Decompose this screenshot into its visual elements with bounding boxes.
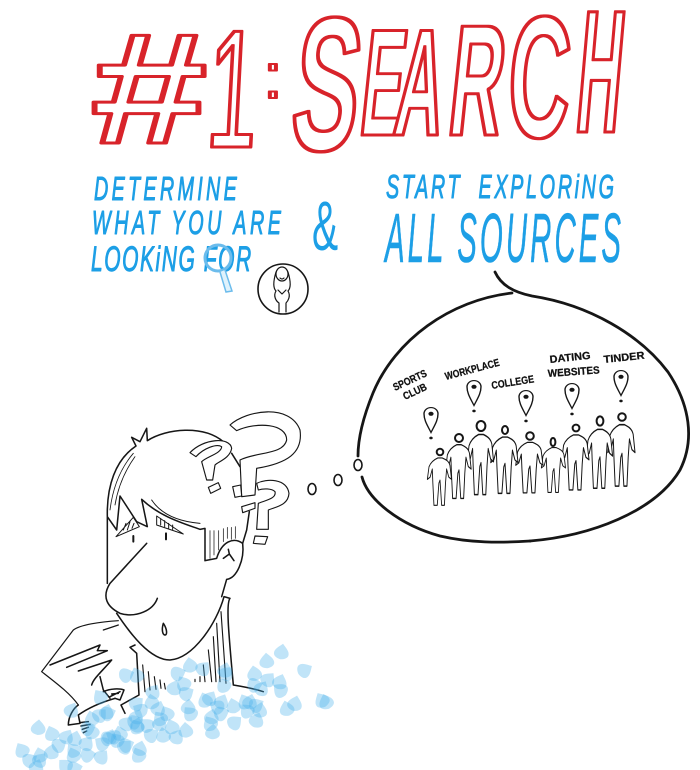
text: start exploring all sources: ALL SOURCES	[383, 199, 621, 278]
title: #1: SEARCH: :	[264, 40, 282, 112]
neck hatching	[143, 612, 226, 692]
nose and smile	[106, 543, 157, 615]
sideburn hatching	[210, 527, 235, 558]
group of people	[427, 413, 635, 505]
text: determine what you are looking for: WHAT YOU ARE	[92, 204, 282, 241]
labels: sources: WORKPLACE	[444, 357, 501, 383]
thought bubbles	[308, 460, 362, 494]
title: #1: SEARCH: 1	[203, 0, 263, 183]
icon: magnifying glass	[205, 245, 232, 292]
speech bubble	[358, 272, 689, 542]
title: #1: SEARCH: #	[91, 1, 207, 177]
ampersand: &	[312, 188, 338, 266]
labels: sources: COLLEGE	[491, 373, 535, 392]
labels: sources: WEBSITES	[547, 364, 600, 380]
icon: woman in circle	[258, 264, 308, 314]
paper	[42, 621, 118, 705]
fingers	[50, 645, 112, 698]
hair and face outline	[107, 428, 249, 583]
man's body, paper and hand	[42, 597, 263, 733]
location pins	[424, 371, 628, 439]
text: determine what you are looking for	[91, 170, 282, 279]
labels: sources: SPORTS	[391, 368, 429, 394]
title: #1: SEARCH: E	[355, 0, 414, 168]
collar and shoulder	[121, 645, 139, 713]
labels: sources: DATING	[549, 350, 591, 366]
text: determine what you are looking for: DETERMINE	[94, 170, 237, 207]
title: #1: SEARCH	[70, 0, 650, 191]
ear	[222, 543, 243, 597]
question marks	[190, 412, 300, 544]
jaw and mouth	[117, 597, 263, 692]
blue leaves	[11, 643, 336, 770]
eyes and brows	[116, 517, 139, 537]
man's head	[106, 412, 300, 615]
title: #1: SEARCH: A	[389, 0, 453, 167]
sleeve and cuff	[68, 698, 115, 733]
text: determine what you are looking for: LOOKiNG FOR	[91, 241, 251, 279]
labels: sources	[391, 350, 646, 403]
text: start exploring all sources: START EXPLORiNG	[386, 168, 614, 205]
labels: sources: TINDER	[603, 350, 646, 366]
labels: sources: CLUB	[401, 381, 429, 403]
